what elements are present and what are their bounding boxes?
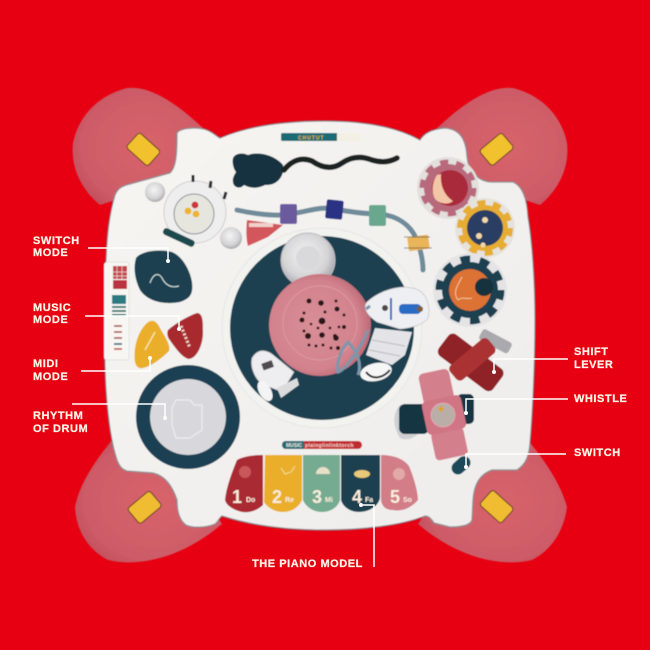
shift lever (435, 331, 506, 394)
icon: midi notes (114, 326, 122, 349)
key 1 Do: Do (246, 497, 255, 504)
callout: switch mode: MODE (33, 247, 68, 259)
astronaut dial (145, 175, 242, 249)
key 4 Fa: 4 (352, 487, 362, 507)
bead blue (325, 199, 344, 220)
tab: top left (126, 132, 161, 166)
tab: bottom left (127, 490, 162, 524)
red sticker (246, 220, 283, 246)
switch mode dial (135, 250, 192, 303)
rocket figure (251, 351, 299, 404)
callout: rhythm of drum: RHYTHM (33, 410, 83, 422)
icon: music bars (112, 295, 126, 316)
callout: midi mode: MODE (33, 371, 68, 383)
music mode button (167, 313, 203, 359)
icon: switch grid (113, 266, 127, 289)
gear: pink (417, 157, 479, 219)
key 2 Re: 2 (272, 487, 282, 507)
callout: the piano model: THE PIANO MODEL (252, 558, 363, 570)
ball right (220, 227, 242, 249)
callout: switch mode: SWITCH (33, 235, 80, 247)
key 2 Re: Re (285, 497, 294, 504)
astronaut figure (337, 287, 429, 384)
key 1 Do: 1 (232, 487, 242, 507)
piano label strip (282, 441, 362, 449)
callout: whistle: WHISTLE (574, 393, 627, 405)
gear: yellow (455, 198, 515, 258)
key 5 So: 5 (390, 487, 400, 507)
callout: switch (464, 447, 621, 469)
pink dome (269, 274, 371, 376)
piano label strip: MUSIC (286, 443, 302, 449)
callout: the piano model (252, 503, 374, 570)
dark pad (162, 227, 196, 248)
leg: top right (435, 88, 567, 205)
bead wire maze (237, 199, 432, 270)
bead green (369, 205, 386, 226)
key 5 So (381, 455, 418, 510)
mode icon strip (104, 262, 129, 360)
bead orange (407, 235, 430, 251)
key 3 Mi: 3 (312, 487, 322, 507)
piano label strip: plainglinlinktorch (305, 443, 354, 449)
gear: navy (433, 253, 507, 327)
leg: bottom left (75, 440, 222, 562)
callout: rhythm of drum (33, 404, 167, 435)
star holes (300, 298, 346, 350)
tab: bottom right (479, 490, 514, 524)
key 3 Mi (303, 455, 340, 512)
key 2 Re (264, 455, 302, 512)
callout: music mode: MUSIC (33, 302, 71, 314)
key 3 Mi: Mi (325, 497, 333, 504)
top maze: rocket and wavy track (233, 153, 397, 188)
planet disk (222, 228, 429, 428)
callout: switch: SWITCH (574, 447, 621, 459)
callout: shift lever (492, 346, 613, 374)
whistle (394, 368, 474, 461)
tab: top right (479, 132, 514, 166)
callout: switch mode (33, 235, 170, 263)
silver knob (281, 233, 335, 287)
callout: midi mode: MIDI (33, 358, 58, 370)
key 4 Fa: Fa (365, 497, 373, 504)
piano keys (225, 455, 418, 512)
callout: music mode: MODE (33, 314, 68, 326)
callout: shift lever: SHIFT (574, 346, 609, 358)
callout: midi mode (33, 356, 152, 383)
bead purple (280, 204, 297, 224)
callout: music mode (33, 302, 181, 331)
callout: whistle (464, 393, 627, 415)
key 5 So: So (403, 497, 412, 504)
toy table (73, 88, 567, 562)
key 1 Do (225, 455, 263, 512)
key 4 Fa (341, 455, 380, 512)
callout: shift lever: LEVER (574, 359, 613, 371)
midi mode button (134, 321, 169, 368)
lever tag (478, 328, 513, 354)
top label strip: CHUTUT (298, 136, 325, 142)
leg: bottom right (418, 440, 567, 562)
board (104, 121, 535, 530)
leg: top left (73, 88, 205, 205)
ball left (145, 182, 165, 202)
switch pill (449, 453, 473, 477)
rhythm drum (136, 365, 240, 469)
top label strip (281, 133, 361, 142)
callout: rhythm of drum: OF DRUM (33, 423, 88, 435)
